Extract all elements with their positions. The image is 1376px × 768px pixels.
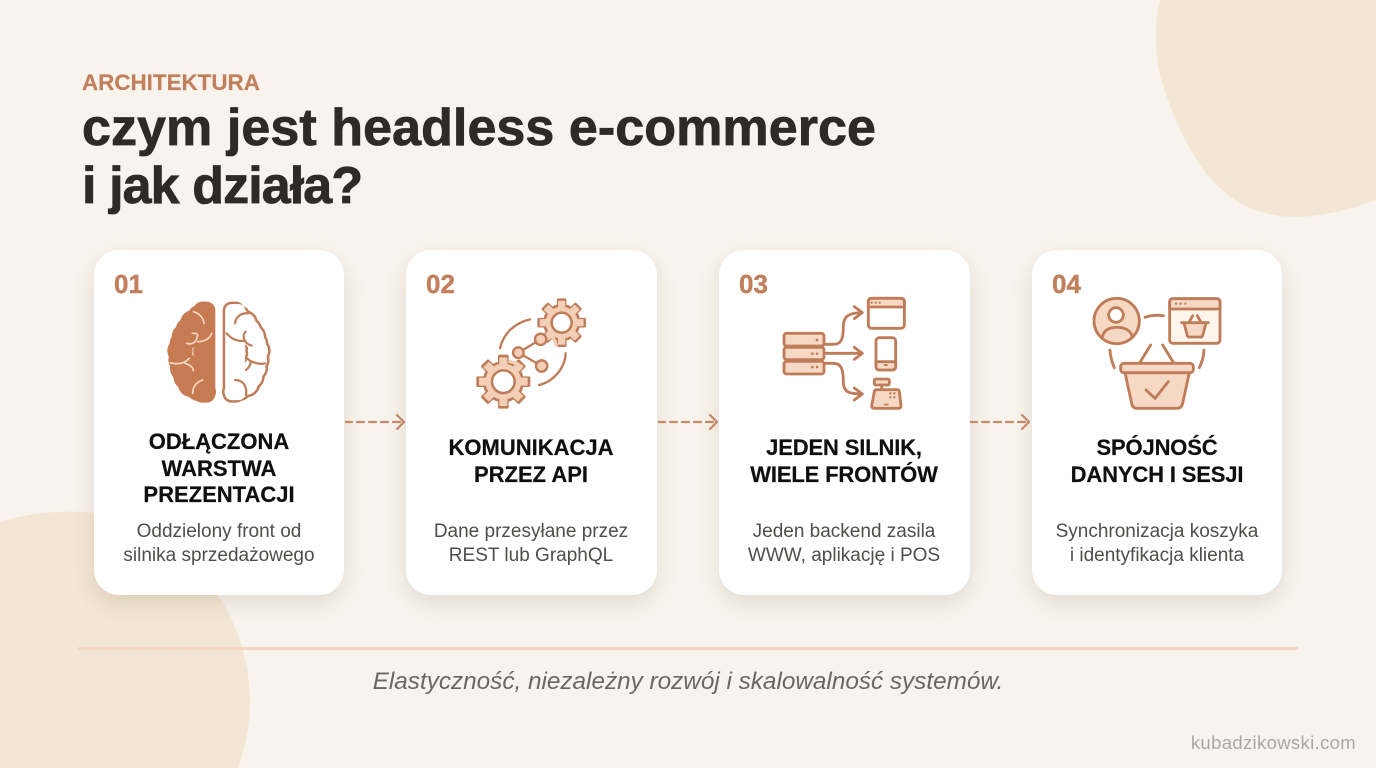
- footer credit: kubadzikowski.com: [1191, 732, 1356, 753]
- text: card 4: i identyfikacja klienta: [1070, 545, 1244, 566]
- blob: bottom left: [0, 512, 250, 768]
- text: card 2: Dane przesyłane przez: [434, 520, 628, 542]
- heading: card 3: WIELE FRONTÓW: [750, 462, 938, 486]
- panel: card 1: [94, 250, 344, 595]
- title: [82, 99, 876, 215]
- text: card 2: [434, 520, 628, 566]
- panel: card 2: [406, 250, 656, 595]
- panel: card 4: [1032, 250, 1282, 595]
- heading: card 1: WARSTWA: [162, 456, 276, 480]
- step number 01: 01: [114, 269, 143, 299]
- blob: top right: [1156, 0, 1376, 217]
- heading: card 1: PREZENTACJI: [143, 482, 295, 507]
- heading: card 4: DANYCH I SESJI: [1071, 462, 1243, 486]
- icon: brain: [167, 302, 271, 403]
- divider line: [78, 647, 1298, 650]
- arrow: 1 to 2: [345, 414, 406, 430]
- text: card 1: [123, 520, 315, 566]
- arrow: 2 to 3: [658, 414, 718, 430]
- heading: card 4: [1071, 434, 1243, 486]
- step number 03: 03: [739, 269, 768, 299]
- panel: card 3: [719, 250, 970, 595]
- text: card 2: REST lub GraphQL: [449, 545, 613, 566]
- heading: card 1: ODŁĄCZONA: [149, 429, 289, 454]
- heading: card 3: JEDEN SILNIK,: [766, 435, 922, 460]
- text: card 3: Jeden backend zasila: [753, 520, 935, 542]
- heading: card 4: SPÓJNOŚĆ: [1096, 435, 1218, 460]
- arrow: 3 to 4: [970, 414, 1030, 430]
- heading: card 3: [750, 435, 938, 486]
- icon: gears with API nodes: [476, 298, 586, 409]
- tagline: Elastyczność, niezależny rozwój i skalowalność systemów.: [373, 668, 1003, 695]
- step number 02: 02: [426, 269, 455, 299]
- title: i jak działa?: [82, 157, 362, 215]
- text: card 3: [748, 520, 940, 566]
- eyebrow label: ARCHITEKTURA: [82, 70, 260, 95]
- text: card 4: Synchronizacja koszyka: [1056, 520, 1258, 542]
- text: card 1: Oddzielony front od: [137, 520, 301, 542]
- text: card 1: silnika sprzedażowego: [123, 545, 315, 566]
- title: czym jest headless e-commerce: [82, 99, 876, 157]
- heading: card 2: KOMUNIKACJA: [448, 435, 614, 460]
- step number 04: 04: [1052, 269, 1081, 299]
- text: card 4: [1056, 520, 1258, 566]
- heading: card 2: PRZEZ API: [474, 462, 588, 486]
- icon: server to three fronts: [782, 296, 906, 410]
- heading: card 2: [448, 435, 614, 486]
- text: card 3: WWW, aplikację i POS: [748, 545, 940, 566]
- heading: card 1: [143, 429, 295, 507]
- icon: customer, store and basket: [1092, 296, 1222, 410]
